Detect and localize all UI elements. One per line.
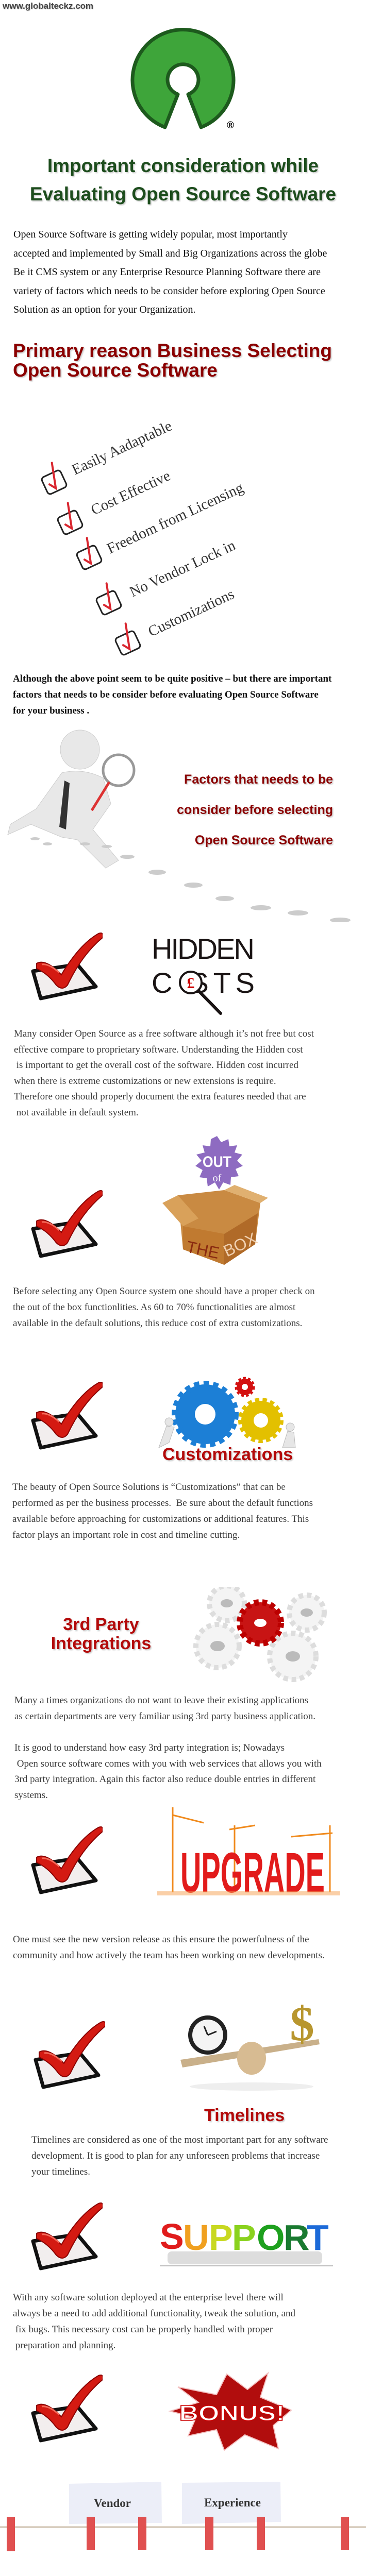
text: although: for your business . [13,705,89,716]
tags: vendor and experience on clothesline: Experience [204,2496,261,2509]
text: 3rd party integrations detail: 3rd party integration. Again this factor also reduce double entries in different [14,1774,315,1785]
icon: out of the box: THE [185,1238,221,1262]
icon: support letters: P [232,2217,256,2258]
icon: open source logo: ® [227,120,234,131]
text: 3rd party integrations detail: Open source software comes with you with web services that allows you with [17,1758,322,1769]
title: Important consideration while [47,155,319,176]
icon: clock and dollar seesaw [180,1996,320,2091]
text: hidden costs: Therefore one should properly document the extra features needed that are [14,1091,306,1102]
title [30,155,337,206]
intro text: Be it CMS system or any Enterprise Resource Planning Software there are [13,266,321,278]
icon: clock and dollar seesaw: $ [290,1996,314,2051]
text: out of the box: available in the default solutions, this reduce cost of extra customizations. [13,1318,302,1329]
icon: hidden costs: £ [187,975,195,992]
heading: customizations: Customizations [162,1445,293,1464]
text: customizations: The beauty of Open Source Solutions is “Customizations” that can be [12,1482,286,1493]
icon: out of the box: BOX [221,1229,260,1260]
text: hidden costs: Many consider Open Source as a free software although it’s not free but cost [14,1028,314,1039]
icon: support letters: T [307,2217,329,2258]
text: support [13,2292,295,2351]
icon: bonus burst: BONUS! [179,2401,285,2425]
heading: 3rd party integrations: 3rd Party [63,1615,139,1634]
text: although [13,673,332,716]
icon: hidden costs: C STS [152,967,255,999]
intro text: Open Source Software is getting widely popular, most importantly [13,229,288,240]
text: timelines: your timelines. [31,2166,90,2177]
icon: checkmark (timelines) [34,2021,105,2089]
heading: factors: Open Source Software [195,833,333,848]
icon: gears with figures [158,1377,296,1448]
text: customizations: available before approaching for customizations or additional features. This [12,1514,309,1524]
text: 3rd party integrations detail [14,1742,322,1801]
text: customizations: performed as per the business processes. Be sure about the default functions [12,1498,313,1509]
text: customizations [12,1482,313,1540]
icon: checkmark (hidden costs) [31,933,103,1001]
text: support: preparation and planning. [15,2340,115,2351]
text: hidden costs [14,1028,314,1118]
text: support: always be a need to add additional functionality, tweak the solution, and [13,2308,295,2319]
text: 3rd party integrations [14,1695,315,1722]
icon: support letters: R [284,2217,310,2258]
heading: primary reasons [13,340,332,382]
icon: out of the box: OUT [203,1154,231,1171]
text: out of the box [13,1286,315,1329]
checklist of reasons: Freedom from Licensing [104,479,246,557]
checklist of reasons: Customizations [145,586,237,640]
intro text: Solution as an option for your Organization. [13,304,195,315]
text: out of the box: Before selecting any Open Source system one should have a proper check on [13,1286,315,1297]
icon: support letters: O [257,2217,285,2258]
intro text: variety of factors which needs to be consider before exploring Open Source [13,285,325,297]
text: hidden costs: not available in default system. [16,1107,139,1118]
title: Evaluating Open Source Software [30,183,336,205]
text: hidden costs: when there is extreme customizations or new extensions is require. [14,1076,276,1086]
checklist of reasons: No Vendor Lock in [127,537,238,600]
site url header: www.globalteckz.com [3,1,93,11]
text: timelines [31,2134,328,2177]
text: support: fix bugs. This necessary cost can be properly handled with proper [15,2324,273,2335]
icon: checkmark (bonus) [31,2375,103,2442]
text: upgrade: community and how actively the team has been working on new developments. [13,1950,325,1961]
heading: primary reasons: Open Source Software [13,360,218,381]
icon: checkmark (out of box) [31,1190,103,1258]
text: customizations: factor plays an important role in cost and timeline cutting. [12,1530,240,1540]
text: 3rd party integrations: as certain departments are very familiar using 3rd party business application. [14,1711,315,1722]
text: hidden costs: effective compare to proprietary software. Understanding the Hidden cost [14,1044,303,1055]
checklist of reasons [41,418,246,655]
icon: upgrade cranes [157,1807,340,1899]
icon: bonus burst [168,2371,292,2451]
icon: hidden costs [152,935,255,1015]
tags: vendor and experience on clothesline [0,2482,366,2551]
text: timelines: development. It is good to plan for any unforeseen problems that increase [31,2150,320,2161]
heading: factors: Factors that needs to be [184,772,333,787]
text: upgrade [13,1934,325,1961]
tags: vendor and experience on clothesline: Vendor [94,2497,131,2510]
heading: 3rd party integrations: Integrations [51,1634,151,1653]
icon: support letters: U [183,2217,209,2258]
icon: white gears with red gear [193,1587,327,1682]
heading: timelines: Timelines [204,2106,285,2125]
heading: factors [177,772,334,849]
icon: checkmark (upgrade) [31,1826,103,1894]
text: 3rd party integrations detail: It is good to understand how easy 3rd party integration is; Nowadays [14,1742,285,1753]
text: although: Although the above point seem to be quite positive – but there are important [13,673,331,684]
text: out of the box: the out of the box functionlities. As 60 to 70% functionalities are almost [13,1302,295,1313]
checklist of reasons: Easily Aadaptable [69,418,174,478]
text: 3rd party integrations: Many a times organizations do not want to leave their existing applications [14,1695,308,1706]
intro text: accepted and implemented by Small and Big Organizations across the globe [13,247,327,259]
heading: 3rd party integrations [51,1615,152,1654]
intro text [13,229,327,315]
text: 3rd party integrations detail: systems. [14,1790,48,1801]
icon: support letters [160,2216,333,2266]
icon: checkmark (support) [31,2202,103,2270]
text: upgrade: One must see the new version release as this ensure the powerfulness of the [13,1934,309,1945]
icon: open source logo [130,28,236,131]
heading: factors: consider before selecting [177,803,333,817]
text: hidden costs: is important to get the overall cost of the software. Hidden cost incurred [16,1060,298,1071]
heading: primary reasons: Primary reason Business Selecting [13,340,332,361]
icon: out of the box: of [213,1173,222,1184]
text: support: With any software solution deployed at the enterprise level there will [13,2292,284,2303]
icon: out of the box [162,1136,268,1265]
text: timelines: Timelines are considered as one of the most important part for any software [31,2134,328,2145]
icon: checkmark (customizations) [31,1382,103,1450]
icon: support letters: S [160,2216,184,2257]
text: although: factors that needs to be consider before evaluating Open Source Software [13,689,319,700]
checklist of reasons: Cost Effective [88,467,173,518]
icon: support letters: P [209,2217,233,2258]
illustration: man with magnifier and footprints [7,730,351,922]
